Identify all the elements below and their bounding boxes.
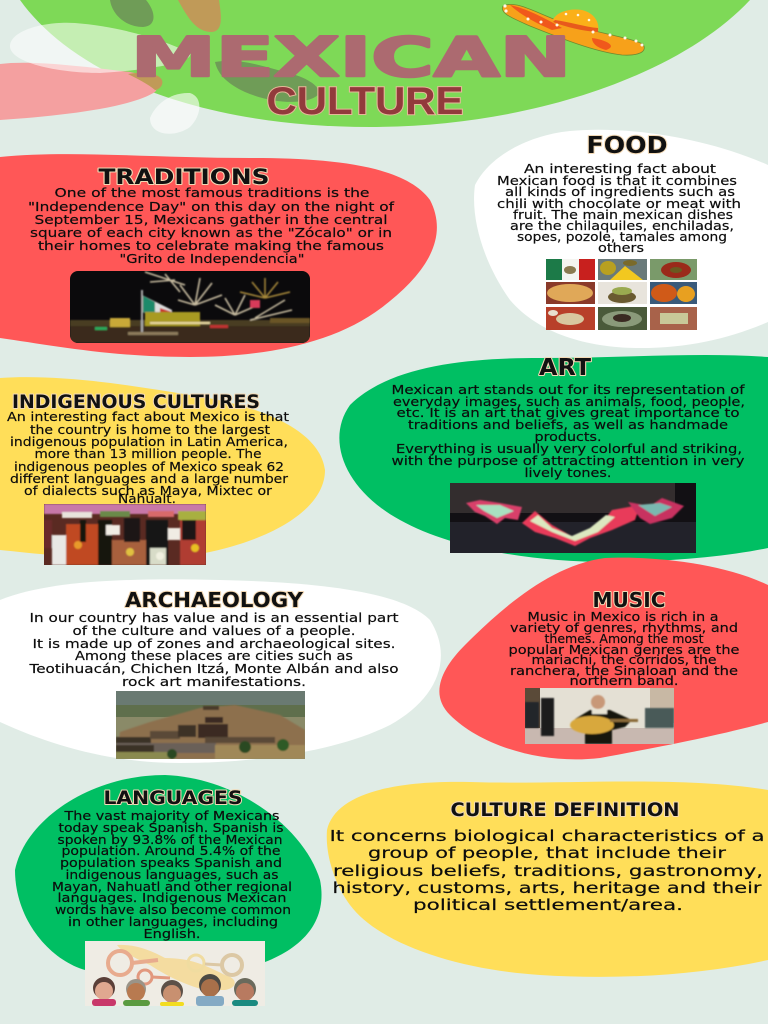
image: map of Mexico with people <box>85 941 265 1006</box>
text block: "Independence Day" on this day on the night of <box>28 199 395 214</box>
text block: Mayan, Nahuatl and other regional <box>52 879 292 894</box>
text block: the country is home to the largest <box>30 422 270 437</box>
text block: rock art manifestations. <box>122 674 306 689</box>
text block: mariachi, the corridos, the <box>532 652 717 667</box>
people <box>92 974 258 1006</box>
text block <box>52 808 292 941</box>
text block: are the chilaquiles, enchiladas, <box>510 218 734 233</box>
text block: languages. Indigenous Mexican <box>58 890 286 905</box>
text block: Mexican food is that it combines <box>497 173 737 188</box>
decorative blobs <box>0 0 319 134</box>
text block: chili with chocolate or meat with <box>497 196 741 211</box>
title: MEXICAN: MEXICAN <box>131 26 571 89</box>
blob <box>339 355 768 562</box>
text block: indigenous languages, such as <box>66 867 278 882</box>
blob <box>15 775 322 972</box>
panel: art <box>339 355 768 562</box>
text block: of dialects such as Maya, Mixtec or <box>24 483 273 498</box>
text block: ranchera, the Sinaloan and the <box>510 663 738 678</box>
text block: population. Around 5.4% of the <box>62 843 281 858</box>
heading: TRADITIONS <box>98 165 270 189</box>
text block: history, customs, arts, heritage and their <box>332 879 762 897</box>
text block <box>497 161 741 255</box>
text block: square of each city known as the "Zócalo" or in <box>30 225 392 240</box>
text block <box>28 185 395 266</box>
text block: Music in Mexico is rich in a <box>528 609 718 624</box>
panel: food <box>474 130 768 348</box>
text block: population speaks Spanish and <box>60 855 282 870</box>
text block <box>508 609 740 688</box>
text block: Nahualt. <box>118 491 176 506</box>
panel: traditions <box>0 154 437 357</box>
text block: One of the most famous traditions is the <box>54 185 370 200</box>
heading: ARCHAEOLOGY <box>125 588 304 612</box>
text block: In our country has value and is an essential part <box>30 610 399 625</box>
heading: ART <box>539 355 591 381</box>
text block: An interesting fact about Mexico is that <box>7 409 289 424</box>
text block: The vast majority of Mexicans <box>63 808 280 823</box>
image: food grid with flag <box>546 259 697 330</box>
text block: "Grito de Independencia" <box>120 251 304 266</box>
blob <box>0 154 437 357</box>
text block: September 15, Mexicans gather in the central <box>34 212 388 227</box>
text block: northern band. <box>570 673 678 688</box>
text block: Everything is usually very colorful and striking, <box>396 441 742 456</box>
text block: different languages and a large number <box>10 471 289 486</box>
text block: everyday images, such as animals, food, people, <box>393 394 745 409</box>
icon: sombrero <box>502 4 644 55</box>
text block: all kinds of ingredients such as <box>505 184 735 199</box>
text block: words have also become common <box>55 902 291 917</box>
panel: archaeology <box>0 579 441 763</box>
blob <box>327 781 768 977</box>
text block: their homes to celebrate making the famous <box>38 238 384 253</box>
title: CULTURE: CULTURE <box>266 80 464 123</box>
text block: An interesting fact about <box>524 161 716 176</box>
panel: music <box>439 558 768 759</box>
blob <box>439 558 768 759</box>
heading: INDIGENOUS CULTURES <box>12 392 260 413</box>
text block: Among these places are cities such as <box>75 648 353 663</box>
blob <box>474 130 768 348</box>
panel: culture definition <box>327 781 768 977</box>
text block: more than 13 million people. The <box>34 446 262 461</box>
text block: in other languages, including <box>68 914 278 929</box>
text block: etc. It is an art that gives great importance to <box>396 405 740 420</box>
image: fireworks over the Zócalo <box>70 271 310 343</box>
text block: traditions and beliefs, as well as handmade <box>408 417 728 432</box>
blob <box>0 579 441 763</box>
text block: indigenous population in Latin America, <box>10 434 288 449</box>
text block: group of people, that include their <box>368 844 727 862</box>
text block: spoken by 93.8% of the Mexican <box>58 832 282 847</box>
text block: religious beliefs, traditions, gastronomy, <box>333 862 763 880</box>
image: folk dancers <box>450 483 696 553</box>
text block <box>7 409 289 506</box>
text block: with the purpose of attracting attention in very <box>392 453 745 468</box>
text block <box>28 610 399 689</box>
text block: Mexican art stands out for its representation of <box>392 382 745 397</box>
text block: English. <box>144 926 200 941</box>
heading: FOOD <box>586 133 668 159</box>
text block: It concerns biological characteristics of a <box>330 827 764 845</box>
image: women in traditional dress <box>44 504 206 565</box>
text block: themes. Among the most <box>544 631 704 646</box>
text block <box>392 382 745 480</box>
text block: fruit. The main mexican dishes <box>513 207 733 222</box>
text block: Teotihuacán, Chichen Itzá, Monte Albán and also <box>28 661 399 676</box>
text block: today speak Spanish. Spanish is <box>58 820 284 835</box>
text block: of the culture and values of a people. <box>72 623 356 638</box>
heading: MUSIC <box>592 588 666 612</box>
text block: others <box>598 240 644 255</box>
text block: products. <box>534 429 602 444</box>
text block: political settlement/area. <box>413 896 683 914</box>
panel: languages <box>15 775 322 1006</box>
text block: variety of genres, rhythms, and <box>510 620 738 635</box>
text block: indigenous peoples of Mexico speak 62 <box>14 459 284 474</box>
blob <box>0 377 325 559</box>
image: pyramid of Teotihuacán <box>116 691 305 759</box>
green header blob <box>20 0 750 127</box>
header banner <box>0 0 750 134</box>
heading: CULTURE DEFINITION <box>450 800 680 821</box>
text block: It is made up of zones and archaeological sites. <box>32 636 396 651</box>
text block: sopes, pozole, tamales among <box>517 229 727 244</box>
text block <box>330 827 764 914</box>
text block: popular Mexican genres are the <box>508 642 740 657</box>
panel: indigenous cultures <box>0 377 325 565</box>
image: mariachi with guitar <box>525 688 674 744</box>
text block: lively tones. <box>524 465 612 480</box>
heading: LANGUAGES <box>104 787 242 809</box>
